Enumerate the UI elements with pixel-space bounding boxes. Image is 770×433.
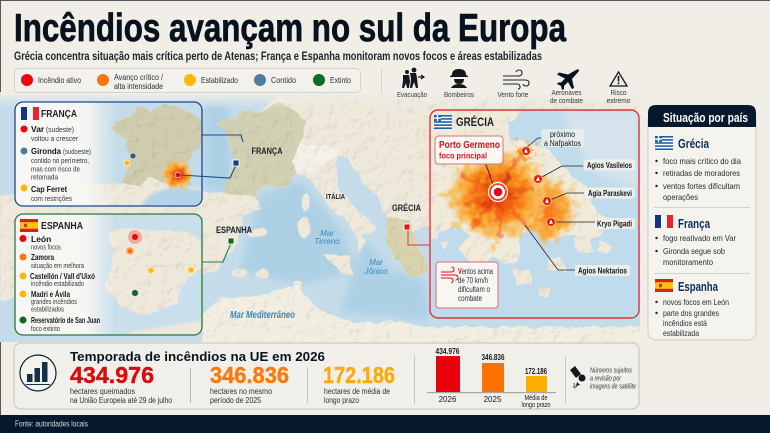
- country: França: França: [678, 216, 711, 231]
- marker: Agios Vasileios: [533, 174, 543, 184]
- item: Zamora: situação em melhora: [31, 261, 85, 270]
- header: [648, 105, 756, 127]
- item: Cap Ferret: [20, 184, 72, 203]
- item: Var: Var: [31, 124, 45, 134]
- bar chart: 346.836: [482, 353, 505, 362]
- item: Var: [20, 124, 78, 143]
- country: França: monitoramento: [663, 257, 713, 267]
- country: Grécia: Grécia: [678, 136, 710, 151]
- item: Gironda: Gironda: [31, 146, 61, 156]
- item: Cap Ferret: com restrições: [31, 194, 72, 203]
- marker: Agia Paraskevi: [542, 196, 552, 206]
- icon: aircraft: Aeronaves: [552, 88, 582, 97]
- item: Castellón: [20, 271, 95, 288]
- bar chart: 434.976: [436, 347, 460, 356]
- legend: Estabilizado: [201, 76, 238, 85]
- note: a revisão por: [590, 374, 621, 382]
- panel: Grécia: [425, 105, 640, 318]
- item: Gironda: mas com risco de: [31, 164, 80, 174]
- item: Reservatório de San Juan: [20, 315, 100, 333]
- land: North Africa: [202, 285, 650, 345]
- country: França: Gironda segue sob: [663, 246, 725, 256]
- icon: aircraft: de combate: [550, 96, 583, 105]
- icon: bar chart: [20, 355, 56, 391]
- item: Madri e Ávila: estabilizados: [31, 304, 64, 314]
- main map labels: ITÁLIA: [326, 192, 345, 201]
- stat: 2026: [70, 362, 172, 405]
- icon: extreme risk: Risco: [610, 88, 626, 97]
- panel: Situação por país: [648, 105, 756, 340]
- stat: 2026: hectares queimados: [70, 387, 135, 396]
- bar chart: longo prazo: [522, 400, 550, 409]
- icon: extreme risk: [606, 72, 630, 105]
- country: Grécia: operações: [663, 192, 698, 202]
- country: Espanha: [655, 279, 729, 338]
- main map labels: Tirreno: [314, 237, 340, 246]
- item: Zamora: Zamora: [31, 252, 54, 262]
- main map labels: [216, 146, 421, 321]
- flag: Grécia: [434, 115, 452, 129]
- flag: Espanha: [20, 219, 38, 232]
- country: França: [655, 215, 736, 267]
- country: França: fogo reativado em Var: [663, 233, 736, 243]
- callout: wind: [436, 262, 498, 308]
- main map labels: FRANÇA: [252, 146, 283, 157]
- marker: Porto Germeno: [488, 182, 508, 202]
- main map labels: Mar Mediterrâneo: [230, 309, 295, 321]
- label: próximo a Nafpaktos: a Nafpaktos: [544, 139, 581, 148]
- panel: Temporada de incêndios: [14, 343, 639, 409]
- stat: 2025: 346.836: [210, 362, 289, 388]
- item: León: novos focos: [31, 242, 61, 252]
- item: Madri e Ávila: grandes incêndios: [31, 297, 77, 306]
- panel: Espanha: [15, 214, 202, 335]
- flag: França: [21, 107, 39, 120]
- icon: aircraft: [550, 69, 583, 105]
- icon: firefighters: Bombeiros: [444, 90, 474, 99]
- stat: 2025: [210, 362, 289, 405]
- item: Gironda: retomada: [31, 172, 59, 182]
- label: Kryo Pigadi: Kryo Pigadi: [597, 220, 632, 228]
- stat: 2026: na União Europeia até 29 de julho: [70, 396, 172, 405]
- icon: evacuation: [397, 68, 427, 99]
- callout: wind: de 70 km/h: [458, 276, 488, 285]
- legend: Extinto: [330, 76, 351, 85]
- country: Espanha: incêndios está: [663, 318, 707, 328]
- map of southern Europe: [0, 92, 650, 345]
- marker: León: [128, 230, 142, 244]
- bar chart: Média de: [524, 393, 548, 402]
- title: Incêndios avançam no sul da Europa: [14, 7, 566, 50]
- stat: long-term average: longo prazo: [324, 396, 359, 405]
- panel: Espanha: ESPANHA: [41, 220, 83, 232]
- stat: 2026: 434.976: [70, 362, 154, 388]
- legend: Avanço crítico /: [114, 73, 164, 82]
- country: Espanha: Espanha: [678, 279, 719, 294]
- marker: Kryo Pigadi: [546, 217, 556, 227]
- land: Greece tint: [387, 217, 428, 278]
- marker: Madri: [147, 266, 155, 274]
- item: Gironda: contido no perímetro,: [31, 156, 89, 165]
- label: Agia Paraskevi: [585, 188, 635, 198]
- stat: long-term average: [323, 362, 395, 405]
- stat: long-term average: hectares de média de: [324, 387, 390, 396]
- islands: [301, 194, 309, 212]
- marker: Castellón: [187, 266, 195, 274]
- note: imagens de satélite: [590, 382, 636, 390]
- label: Agios Nektarios: Agios Nektarios: [578, 266, 627, 276]
- connector: Grécia: [404, 224, 456, 245]
- bar chart: 2025: [484, 395, 502, 404]
- country: Grécia: retiradas de moradores: [663, 168, 740, 178]
- header: Situação por país: [663, 110, 748, 125]
- label: Agia Paraskevi: Agia Paraskevi: [588, 189, 632, 198]
- marker: Gironda: [130, 153, 136, 159]
- icon: satellite: [570, 366, 586, 388]
- label: próximo a Nafpaktos: [541, 129, 584, 148]
- callout: Porto Germeno: foco principal: [439, 150, 487, 160]
- marker: Var: [175, 172, 181, 178]
- icon: extreme risk: extremo: [606, 96, 630, 105]
- country: Grécia: foco mais crítico do dia: [663, 156, 741, 166]
- callout: wind: Ventos acima: [458, 267, 493, 276]
- icon: firefighters: [444, 69, 474, 99]
- panel: Grécia: GRÉCIA: [456, 116, 494, 129]
- legend: Incêndio ativo: [38, 76, 81, 85]
- item: Madri e Ávila: [20, 289, 77, 314]
- item: Reservatório de San Juan: Reservatório de San Juan: [31, 315, 100, 325]
- main map labels: Jônico: [363, 267, 388, 276]
- note: [590, 366, 636, 390]
- marker: Nafpaktos: [521, 146, 531, 156]
- icon: strong wind: [498, 70, 529, 99]
- note: Números sujeitos: [590, 366, 632, 374]
- item: Var: (sudeste): [46, 125, 74, 134]
- bar chart: [427, 347, 556, 409]
- panel: França: FRANÇA: [41, 108, 77, 120]
- land: Alps: [292, 143, 340, 176]
- item: Var: voltou a crescer: [31, 134, 78, 143]
- label: próximo a Nafpaktos: próximo: [550, 130, 575, 139]
- fire: Var: [163, 160, 193, 190]
- marker: Cap Ferret: [124, 160, 130, 166]
- land: France tint: [217, 102, 308, 197]
- burn veins: [440, 150, 540, 250]
- heading: Temporada de incêndios na UE em 2026: [70, 349, 325, 364]
- main map labels: Mar: [320, 229, 334, 238]
- main map labels: Mar: [369, 258, 383, 267]
- connector: França: [180, 135, 243, 178]
- legend: alta intensidade: [114, 82, 163, 91]
- legend: [14, 68, 360, 92]
- country: Espanha: estabilizada: [663, 328, 699, 338]
- marker: San Juan: [132, 290, 138, 296]
- stat: 2025: período de 2025: [210, 396, 261, 405]
- item: Zamora: [20, 252, 85, 270]
- main map labels: ESPANHA: [216, 225, 252, 236]
- main map labels: GRÉCIA: [392, 203, 421, 214]
- stat: 2025: hectares no mesmo: [210, 387, 272, 396]
- item: Castellón: Castellón / Vall d'Uixó: [30, 271, 95, 281]
- item: Reservatório de San Juan: foco extinto: [31, 324, 60, 333]
- leader lines: [486, 138, 595, 270]
- subtitle: Grécia concentra situação mais crítica perto de Atenas; França e Espanha monitoram novos focos e áreas estabilizadas: [14, 49, 542, 63]
- callout: Porto Germeno: [435, 136, 503, 164]
- legend: Contido: [271, 76, 296, 85]
- item: Cap Ferret: Cap Ferret: [31, 184, 67, 194]
- burn area: [445, 140, 578, 246]
- country: Espanha: parte dos grandes: [663, 308, 719, 318]
- panel: França: [15, 102, 202, 206]
- callout: wind: dificultam o: [458, 285, 490, 294]
- label: Agios Vasileios: [584, 160, 635, 170]
- connector: Espanha: [202, 238, 234, 262]
- land: Europe: [0, 95, 650, 300]
- item: Madri e Ávila: Madri e Ávila: [31, 289, 70, 299]
- country: Espanha: novos focos em León: [663, 297, 729, 307]
- item: Castellón: incêndio estabilizado: [31, 279, 84, 288]
- item: León: [20, 234, 61, 252]
- item: Gironda: (sudoeste): [63, 147, 91, 156]
- footer: [0, 415, 770, 433]
- marker: Zamora: [126, 247, 134, 255]
- country: Grécia: [655, 136, 741, 202]
- icon: evacuation: Evacuação: [397, 90, 427, 99]
- stat: long-term average: 172.186: [323, 362, 395, 388]
- footer: Fonte: autoridades locais: [15, 420, 88, 428]
- item: León: León: [31, 234, 51, 244]
- label: Agios Vasileios: Agios Vasileios: [587, 161, 632, 170]
- country: Grécia: ventos fortes dificultam: [663, 181, 740, 191]
- callout: Porto Germeno: Porto Germeno: [439, 140, 500, 151]
- callout: wind: combate: [458, 294, 482, 303]
- bar chart: 172.186: [525, 367, 547, 376]
- item: Gironda: [20, 146, 91, 182]
- label: Kryo Pigadi: [595, 218, 635, 229]
- icon: strong wind: Vento forte: [498, 90, 528, 99]
- bar chart: 2026: [439, 395, 457, 404]
- label: Agios Nektarios: [575, 265, 630, 276]
